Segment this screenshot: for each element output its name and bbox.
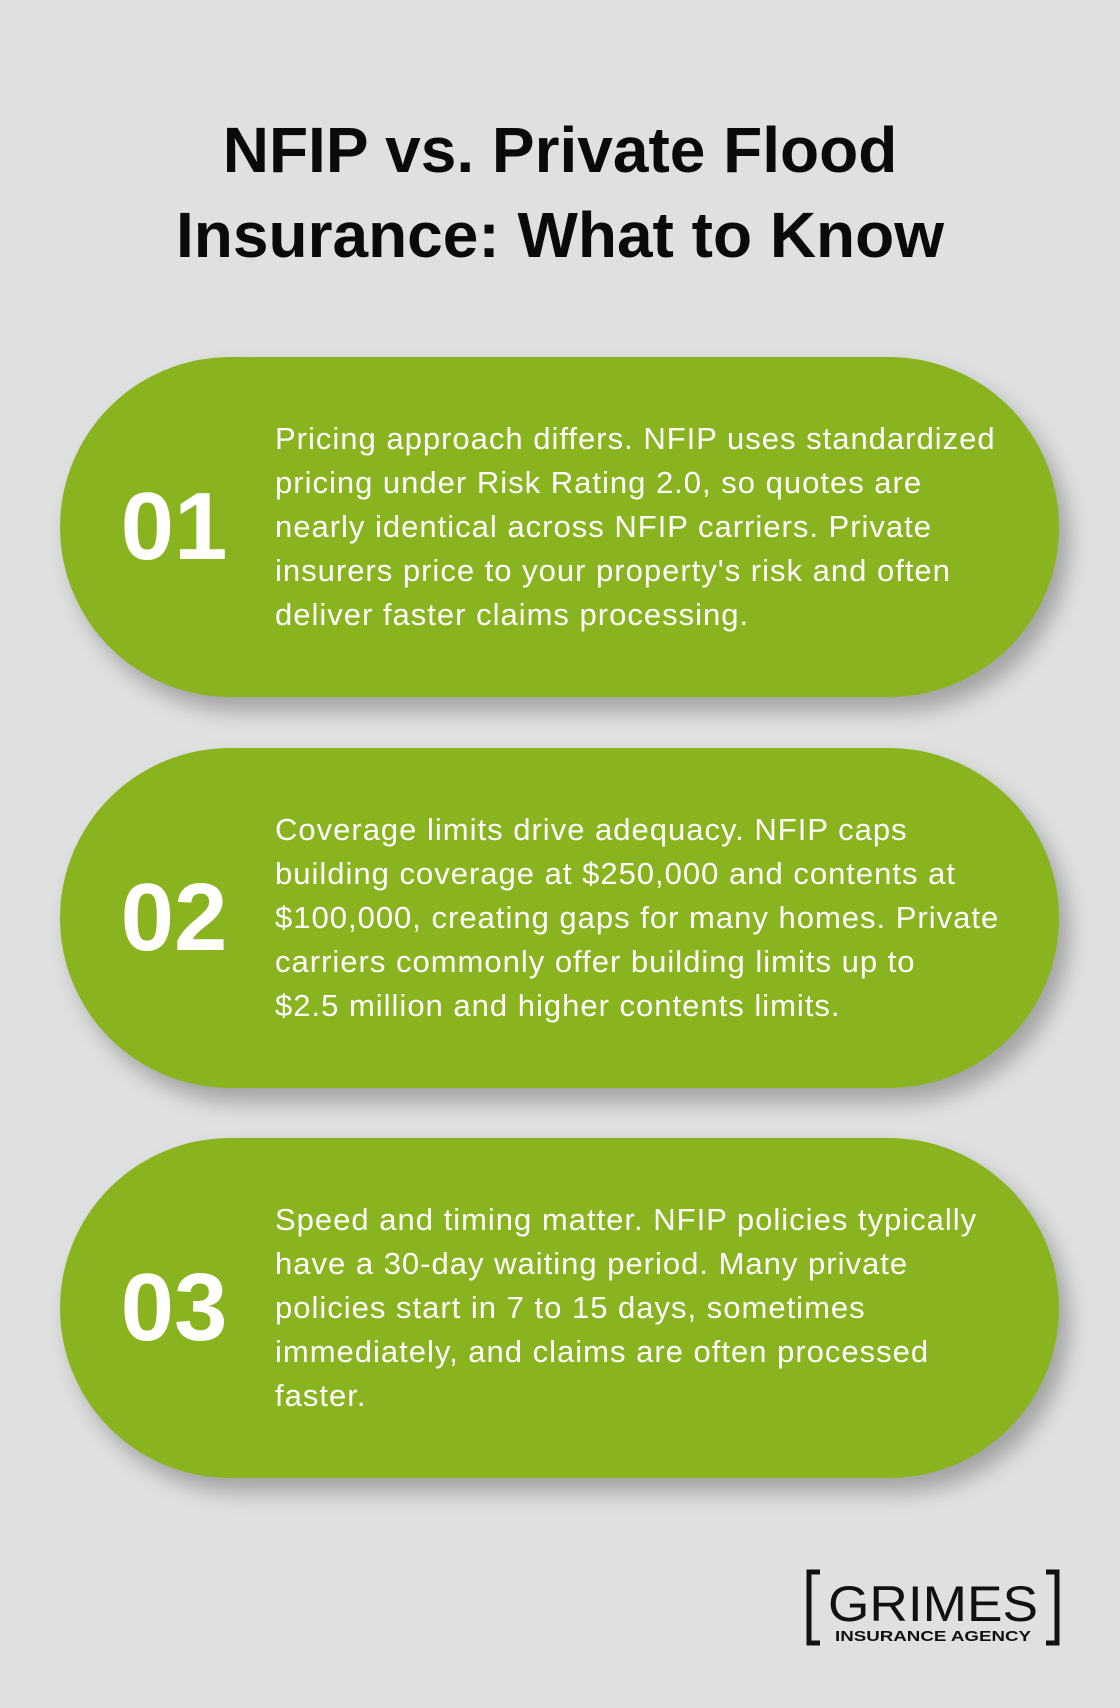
text block 1: [275, 421, 996, 632]
text block 2: carriers commonly offer building limits up to: [275, 944, 916, 979]
text block 1: Pricing approach differs. NFIP uses standardized: [275, 421, 996, 456]
panel: coverage: [60, 748, 1059, 1088]
number 02: 02: [121, 864, 227, 971]
panel: pricing: [60, 357, 1059, 697]
number 03: 03: [121, 1254, 227, 1361]
text block 2: building coverage at $250,000 and contents at: [275, 856, 956, 891]
text block 3: immediately, and claims are often processed: [275, 1334, 929, 1369]
number 01: 01: [121, 473, 227, 580]
text block 2: [275, 812, 999, 1023]
text block 3: faster.: [275, 1378, 366, 1413]
logo: [806, 1570, 1060, 1646]
text block 3: have a 30-day waiting period. Many private: [275, 1246, 908, 1281]
logo: INSURANCE AGENCY: [835, 1628, 1031, 1645]
text block 2: $2.5 million and higher contents limits.: [275, 988, 841, 1023]
text block 3: [275, 1202, 977, 1413]
text block 1: insurers price to your property's risk and often: [275, 553, 951, 588]
panel: timing: [60, 1138, 1059, 1478]
title: NFIP vs. Private Flood: [223, 114, 897, 186]
text block 1: deliver faster claims processing.: [275, 597, 749, 632]
text block 3: Speed and timing matter. NFIP policies typically: [275, 1202, 977, 1237]
text block 1: nearly identical across NFIP carriers. Private: [275, 509, 932, 544]
title: [176, 114, 944, 271]
text block 3: policies start in 7 to 15 days, sometimes: [275, 1290, 866, 1325]
text block 2: $100,000, creating gaps for many homes. Private: [275, 900, 999, 935]
logo: GRIMES: [828, 1576, 1038, 1632]
text block 1: pricing under Risk Rating 2.0, so quotes are: [275, 465, 922, 500]
title: Insurance: What to Know: [176, 199, 944, 271]
text block 2: Coverage limits drive adequacy. NFIP caps: [275, 812, 908, 847]
